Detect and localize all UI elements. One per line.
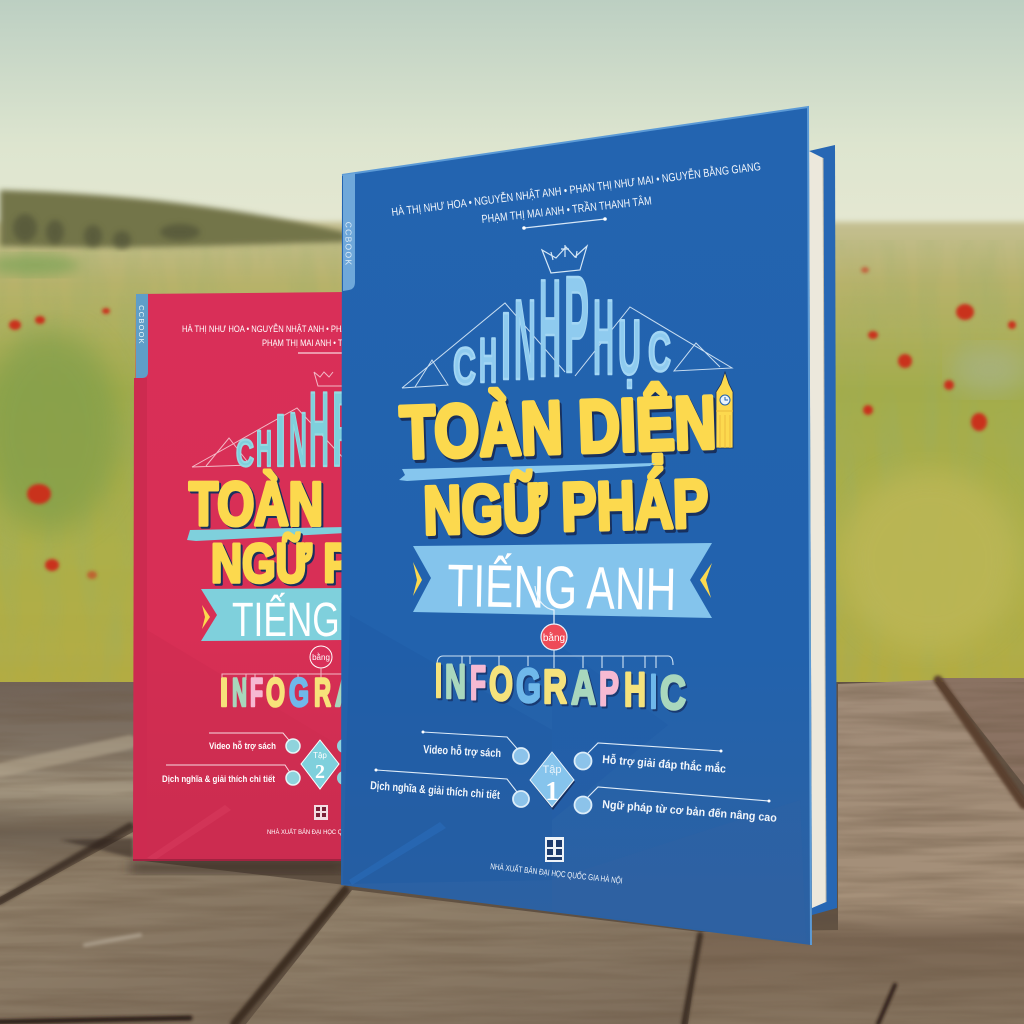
- infographic title: C: [660, 667, 686, 720]
- red heading: chinh phục: H: [309, 369, 329, 489]
- infographic title: A: [572, 664, 598, 717]
- background: poppies: [9, 267, 1016, 579]
- heading: chinh phục: N: [514, 277, 536, 404]
- heading: ngữ pháp: NGỮ PHÁP: [422, 465, 709, 549]
- red infographic title: F: [250, 671, 263, 715]
- red feature list: Dịch nghĩa & giải thích chi tiết: [162, 774, 276, 785]
- red publisher logo and name: [267, 805, 367, 836]
- heading: ngữ pháp: NGỮ PHÁP: [424, 468, 711, 552]
- background: sky: [0, 0, 1024, 240]
- cover edge highlights: [342, 107, 811, 945]
- heading: chinh phục: H: [479, 326, 497, 396]
- banner: tiếng anh: [413, 543, 712, 624]
- blue authors: HÀ THỊ NHƯ HOA • NGUYỄN NHẬT ANH • PHAN THỊ NHƯ MAI • NGUYỄN BẰNG GIANG: [391, 160, 762, 219]
- wooden table: [0, 678, 1024, 1024]
- feature: video support: Video hỗ trợ sách: [423, 743, 501, 760]
- red banner: tiếng anh: [201, 588, 422, 647]
- infographic title: C: [662, 669, 688, 722]
- infographic title: N: [446, 658, 468, 711]
- book: red volume 2: P: [332, 369, 356, 489]
- blue authors: PHẠM THỊ MAI ANH • TRẦN THANH TÂM: [481, 194, 652, 226]
- infographic title: F: [472, 659, 488, 712]
- infographic title: P: [599, 663, 619, 716]
- publisher logo: [545, 837, 564, 862]
- infographic title: N: [445, 656, 466, 709]
- red infographic title: [220, 668, 355, 715]
- red infographic title: G: [289, 671, 309, 715]
- blue authors: [391, 160, 762, 230]
- red heading: chinh phục: H: [256, 420, 272, 477]
- red heading: chinh phục: I: [275, 399, 286, 482]
- heading: chinh phục: C: [648, 320, 671, 383]
- red mountain outline and crown: [192, 372, 345, 467]
- red spine label: [136, 294, 148, 378]
- heading: chinh phục: [453, 248, 671, 406]
- heading: toàn diện: TOÀN DIỆN: [399, 381, 717, 474]
- red infographic title: R: [314, 671, 331, 715]
- heading: chinh phục: Ụ: [618, 303, 641, 391]
- heading: chinh phục: P: [564, 248, 589, 402]
- red feature list: Video hỗ trợ sách: [209, 741, 276, 752]
- volume diamond: 1: [545, 776, 559, 806]
- red volume diamond: Tập: [313, 751, 327, 760]
- red spine label: CCBOOK: [137, 305, 146, 345]
- book: red volume 2: [133, 292, 445, 860]
- heading: chinh phục: C: [453, 338, 476, 396]
- cover facets: [343, 615, 806, 942]
- infographic title: O: [490, 660, 514, 713]
- infographic title: H: [624, 664, 646, 717]
- infographic title: R: [543, 661, 567, 714]
- infographic title: I: [436, 657, 444, 710]
- heading: chinh phục: I: [501, 293, 511, 400]
- infographic title: A: [571, 662, 596, 715]
- red authors: [182, 323, 352, 353]
- feature: explanation: [370, 768, 529, 807]
- icon: crown: [542, 245, 587, 273]
- infographic title: H: [626, 666, 648, 719]
- red infographic title: A: [335, 671, 355, 715]
- red badge: bằng: [310, 646, 332, 668]
- red heading: ngữ pháp: NGỮ PHÁP: [213, 534, 445, 596]
- infographic title: [435, 655, 688, 722]
- book: blue back cover and page block: [809, 145, 837, 915]
- red infographic title: O: [266, 671, 285, 715]
- red infographic title: I: [220, 671, 228, 715]
- red heading: chinh phục: N: [289, 397, 307, 483]
- volume diamond: Tập: [543, 764, 561, 776]
- red book cover: [133, 292, 346, 860]
- red heading: chinh phục: C: [236, 433, 254, 475]
- background: meadow: [0, 222, 1024, 700]
- infographic title: F: [470, 657, 486, 710]
- red badge: bằng: bằng: [312, 653, 330, 662]
- feature: Q&A support: Hỗ trợ giải đáp thắc mắc: [602, 753, 727, 776]
- feature: grammar levels: Ngữ pháp từ cơ bản đến nâng cao: [602, 799, 777, 825]
- infographic title: I: [650, 666, 657, 719]
- infographic title: I: [435, 655, 442, 708]
- infographic title: G: [518, 662, 542, 715]
- infographic title: P: [600, 665, 620, 718]
- feature: grammar levels: [574, 787, 777, 825]
- volume diamond: [530, 752, 575, 810]
- publisher name: NHÀ XUẤT BẢN ĐẠI HỌC QUỐC GIA HÀ NỘI: [490, 860, 623, 886]
- red authors: HÀ THỊ NHƯ HOA • NGUYỄN NHẬT ANH • PHAN: [182, 323, 352, 334]
- icon: clock tower: [716, 372, 733, 448]
- red feature list: [162, 733, 351, 785]
- red authors: PHẠM THỊ MAI ANH • TR: [262, 338, 348, 348]
- feature: Q&A support: [574, 743, 727, 776]
- red heading: toàn: TOÀN: [189, 470, 323, 538]
- red heading: ngữ pháp: NGỮ PHÁP: [211, 532, 443, 594]
- blue spine label: [343, 173, 355, 291]
- infographic title: G: [516, 660, 541, 713]
- background: distant tree line: [0, 190, 345, 249]
- feature: explanation: Dịch nghĩa & giải thích chi tiết: [370, 780, 500, 802]
- badge: bằng: bằng: [543, 631, 565, 644]
- heading: toàn diện: TOÀN DIỆN: [401, 384, 719, 477]
- red volume diamond: 2: [315, 761, 325, 783]
- heading: chinh phục: H: [593, 277, 614, 397]
- blue spine label: CCBOOK: [344, 222, 354, 266]
- red publisher logo and name: NHÀ XUẤT BẢN ĐẠI HỌC QUỐC GIA: [267, 826, 367, 836]
- infographic title: I: [652, 668, 658, 721]
- red ribbon: [187, 527, 346, 541]
- red banner: tiếng anh: TIẾNG ANH: [232, 593, 422, 647]
- banner: tiếng anh: TIẾNG ANH: [447, 552, 677, 623]
- mountain outline: [402, 303, 732, 388]
- red heading: chinh phục: [236, 369, 356, 489]
- blue book cover: [341, 107, 811, 945]
- infographic title: O: [489, 658, 513, 711]
- infographic title: R: [544, 663, 568, 716]
- red volume diamond: [301, 740, 339, 789]
- badge: bằng: [541, 624, 567, 650]
- feature: video support: [422, 730, 529, 764]
- red infographic title: N: [232, 671, 247, 715]
- infographic connector tree: [437, 650, 673, 668]
- ribbon underline: [399, 463, 655, 481]
- book: blue volume 1: [341, 107, 811, 945]
- heading: chinh phục: H: [539, 251, 561, 406]
- red heading: toàn: TOÀN: [191, 472, 325, 540]
- red cover facets: [133, 378, 346, 860]
